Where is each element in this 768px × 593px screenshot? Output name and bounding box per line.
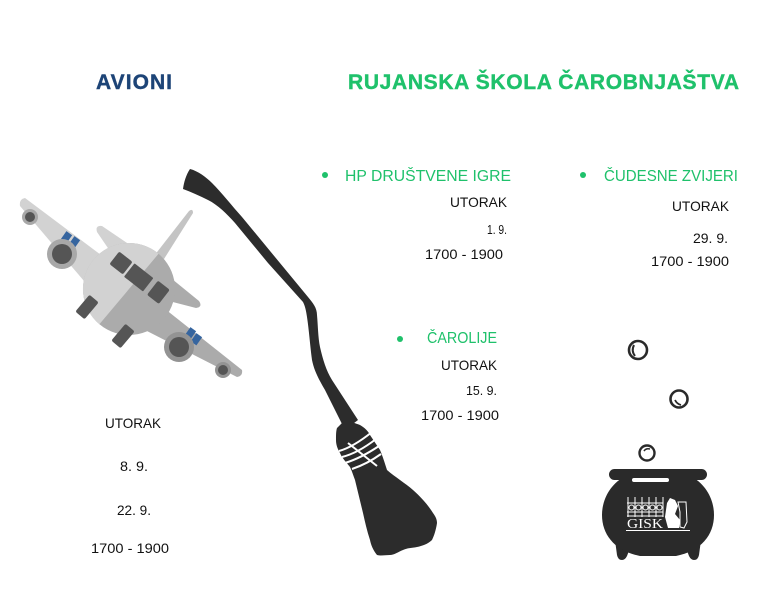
bullet (397, 336, 403, 342)
date: 15. 9. (466, 383, 497, 398)
icon: cauldron with logo (602, 469, 714, 560)
time: 1700 - 1900 (425, 246, 503, 262)
fuselage dark half (83, 243, 175, 335)
broom bindings (339, 432, 381, 469)
time: 1700 - 1900 (421, 407, 499, 423)
heading: ČUDESNE ZVIJERI (604, 166, 738, 185)
fence (627, 497, 663, 517)
title: avioni: AVIONI (96, 71, 172, 94)
broom handle (183, 169, 358, 430)
left wing (20, 198, 105, 288)
title: rujanska škola čarobnjaštva: RUJANSKA ŠKOLA ČAROBNJAŠTVA (348, 70, 739, 94)
tail fin (154, 210, 193, 259)
left tailplane (97, 226, 130, 254)
cauldron rim (609, 469, 707, 480)
cauldron legs (615, 540, 701, 560)
day: UTORAK (672, 198, 730, 214)
date: 8. 9. (120, 458, 148, 474)
right tailplane (165, 279, 200, 308)
day: UTORAK (105, 415, 162, 431)
date: 1. 9. (487, 222, 507, 237)
date: 29. 9. (693, 230, 728, 246)
section: hp društvene igre (322, 166, 511, 262)
bullet (580, 172, 586, 178)
cat (665, 498, 680, 528)
logo baseline (626, 530, 690, 531)
landing gear (75, 295, 99, 319)
logo text: GISK (627, 517, 663, 532)
icon: airplane (20, 198, 242, 378)
time: 1700 - 1900 (651, 253, 729, 269)
section: čudesne zvijeri (580, 166, 738, 269)
cauldron body (602, 478, 714, 556)
section: avioni schedule (91, 415, 169, 556)
day: UTORAK (450, 194, 508, 210)
icon: bubbles (629, 341, 688, 460)
time: 1700 - 1900 (91, 540, 169, 556)
engines (47, 239, 77, 269)
right wing (145, 305, 242, 377)
day: UTORAK (441, 357, 498, 373)
heading: ČAROLIJE (427, 328, 497, 347)
date: 22. 9. (117, 502, 151, 518)
rim highlight (632, 478, 669, 482)
heading: HP DRUŠTVENE IGRE (345, 166, 511, 185)
section: čarolije (397, 328, 499, 423)
wing stripes (61, 231, 202, 345)
bullet (322, 172, 328, 178)
cockpit windows (109, 251, 170, 304)
fuselage light half (83, 243, 159, 324)
broom head (336, 422, 437, 555)
icon: broom (183, 169, 437, 555)
